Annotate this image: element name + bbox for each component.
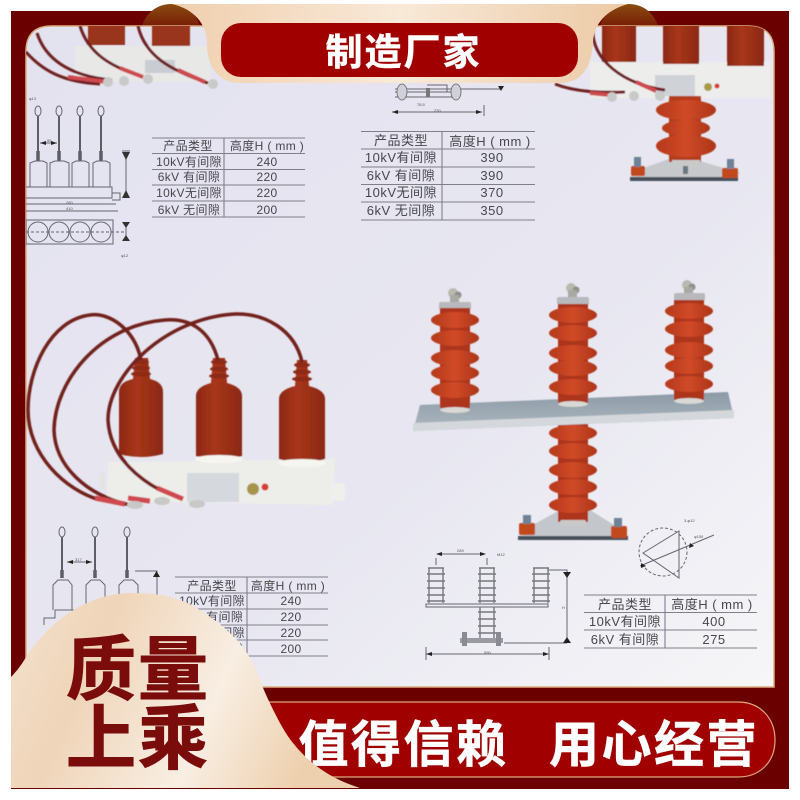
dimension label: 317	[75, 557, 82, 562]
quality badge	[11, 593, 360, 788]
table: four-phase heights: 220	[256, 186, 278, 200]
table: lower right heights	[584, 595, 757, 648]
table: four-phase heights: 高度H ( mm )	[230, 138, 304, 153]
table: bracket heights top centre: 10kV无间隙	[365, 185, 437, 200]
slogan right: 用心经营	[549, 717, 759, 773]
slogan left: 值得信赖	[298, 717, 508, 773]
table: bracket heights top centre: 10kV有间隙	[365, 150, 437, 165]
badge cream wave	[11, 593, 360, 788]
table: three-phase heights: 10kV有间隙	[179, 594, 245, 608]
table: four-phase heights: 220	[256, 170, 278, 184]
table: three-phase heights	[175, 577, 328, 656]
dimension labels	[29, 96, 129, 258]
table: three-phase heights: 10kV无间隙	[179, 626, 245, 640]
table: bracket heights top centre: 370	[480, 185, 504, 200]
table: four-phase heights: 产品类型	[163, 139, 213, 153]
table: lower right heights: 275	[702, 632, 726, 647]
technical drawing: bracket arrester lower right	[426, 518, 714, 660]
left insulator	[431, 288, 479, 413]
table: lower right heights: 6kV 有间隙	[591, 632, 659, 647]
dimension labels	[417, 104, 441, 112]
table: four-phase heights: 240	[256, 155, 278, 169]
pill shape	[200, 702, 775, 777]
photo: top-left arrester crop	[26, 24, 218, 89]
photo: three-phase arrester with cables	[28, 314, 345, 509]
table: three-phase heights: 220	[280, 610, 302, 624]
dimension labels: φ12	[121, 253, 129, 258]
table: bracket heights top centre: 产品类型	[374, 133, 428, 148]
badge heading line one: 质量	[66, 631, 210, 709]
table: bracket heights top centre: 高度H ( mm )	[449, 134, 531, 149]
lower insulator	[549, 420, 597, 526]
slogan pill	[200, 702, 775, 777]
inner product panel	[26, 26, 774, 687]
banner title: 制造厂家	[326, 32, 482, 73]
middle insulator	[549, 283, 597, 407]
dimension labels: 78.5	[417, 102, 426, 107]
panel content	[26, 24, 770, 660]
table: bracket heights top centre: 390	[480, 168, 504, 183]
table: three-phase heights: 200	[280, 642, 302, 656]
table: bracket heights top centre: 390	[480, 150, 504, 165]
dimension labels: 3-φ12	[684, 518, 695, 523]
banner red pill	[221, 23, 578, 77]
table: four-phase heights: 6kV 有间隙	[158, 170, 220, 184]
dimension labels: H	[562, 605, 565, 610]
table: three-phase heights: 高度H ( mm )	[251, 578, 325, 593]
table: bracket heights top centre	[361, 132, 535, 220]
photo: top-right arrester	[555, 24, 770, 181]
dimension labels	[457, 518, 704, 655]
technical drawing: top centre bracket	[392, 84, 504, 116]
table: bracket heights top centre: 350	[480, 203, 504, 218]
banner cream backing	[172, 4, 628, 83]
table: three-phase heights: 220	[280, 626, 302, 640]
table: lower right heights: 产品类型	[598, 597, 652, 612]
table: four-phase heights: 10kV无间隙	[156, 186, 222, 200]
table: three-phase heights: 产品类型	[187, 579, 237, 593]
table: four-phase heights: 6kV 无间隙	[158, 203, 220, 217]
table: bracket heights top centre: 6kV 无间隙	[367, 203, 435, 218]
right insulator	[665, 280, 713, 404]
table: four-phase heights: 10kV有间隙	[156, 155, 222, 169]
table: bracket heights top centre: 6kV 有间隙	[367, 168, 435, 183]
table: three-phase heights: 6kV 有间隙	[181, 610, 243, 624]
table: lower right heights: 高度H ( mm )	[671, 597, 753, 612]
brown corner accent left	[141, 4, 201, 64]
dimension labels: 230	[434, 108, 441, 113]
dimension labels: φ13	[29, 96, 37, 101]
dimension labels: 85	[47, 138, 52, 143]
photo: polymer arrester on steel bracket	[413, 280, 734, 540]
base plate plan	[639, 528, 714, 578]
technical drawing: three-phase arrester lower left	[44, 527, 160, 625]
dimension labels: M12	[497, 552, 506, 557]
dimension labels: 410	[66, 206, 73, 211]
steel bracket	[415, 392, 732, 426]
table: lower right heights: 400	[702, 614, 726, 629]
table: lower right heights: 10kV有间隙	[589, 614, 661, 629]
badge heading line two: 上乘	[66, 700, 210, 778]
dimension labels: 289	[457, 548, 464, 553]
brown corner accent right	[599, 4, 659, 64]
table: three-phase heights: 6kV 无间隙	[181, 642, 243, 656]
table: three-phase heights: 240	[280, 594, 302, 608]
technical drawing: four-phase arrester	[26, 96, 130, 258]
dimension labels: 280	[66, 200, 73, 205]
title banner	[172, 4, 628, 83]
table: four-phase heights	[152, 138, 305, 217]
phase insulators	[427, 568, 550, 640]
base plate	[518, 510, 628, 540]
table: four-phase heights: 200	[256, 203, 278, 217]
dimension labels: 590	[484, 650, 491, 655]
cable neck ribs	[131, 360, 312, 382]
dimension labels: φ150	[694, 534, 704, 539]
